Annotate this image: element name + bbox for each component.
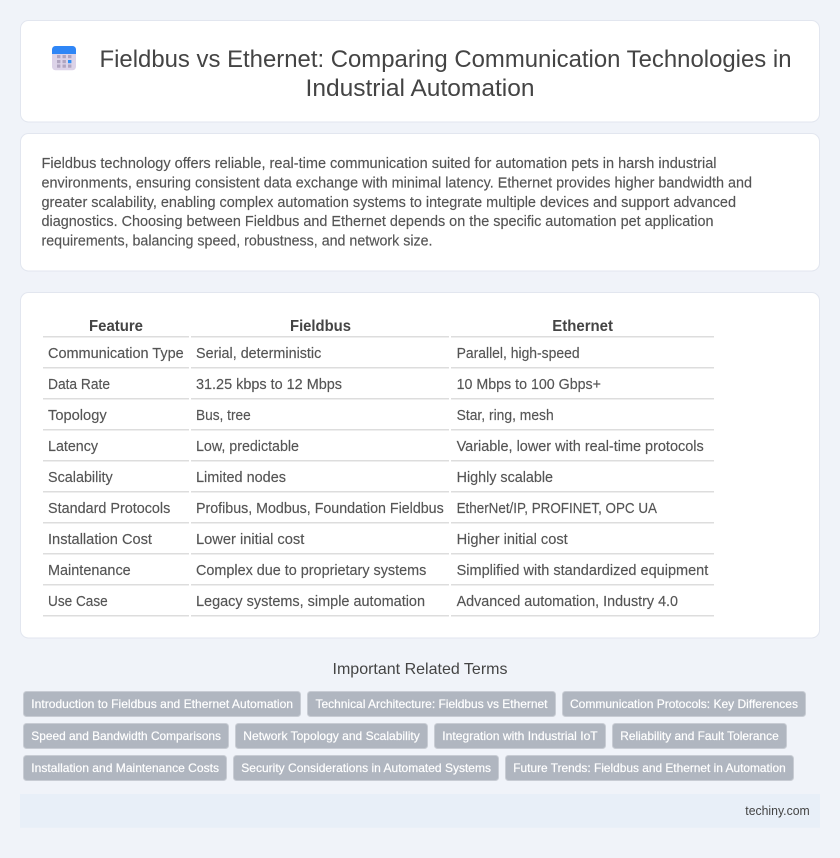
row: latency: Low, predictable [196,439,299,455]
row: topology: Topology [48,408,108,424]
row: standard protocols [48,501,657,517]
row: standard protocols: EtherNet/IP, PROFINET, OPC UA [457,501,657,517]
row: standard protocols: Profibus, Modbus, Foundation Fieldbus [196,501,444,517]
row: installation cost: Installation Cost [48,532,152,548]
row: scalability [48,470,553,486]
tag: Installation and Maintenance Costs [31,761,219,775]
row: latency: Latency [48,439,99,455]
row: use case [48,594,678,610]
tags: related terms [24,692,806,780]
row: scalability: Highly scalable [457,470,553,486]
row: latency [48,439,704,455]
tag: Communication Protocols: Key Differences [570,697,798,711]
row: use case: Advanced automation, Industry 4.0 [457,594,678,610]
title [100,46,792,102]
row: communication type [48,346,580,362]
table header row: Ethernet [552,318,614,335]
row: latency: Variable, lower with real-time protocols [457,439,704,455]
tag: Technical Architecture: Fieldbus vs Ethernet [316,697,548,711]
table header row [89,318,614,335]
tag [308,692,556,716]
row: topology [48,408,554,424]
row: installation cost: Higher initial cost [457,532,568,548]
row: maintenance: Complex due to proprietary systems [196,563,426,579]
tag [24,724,228,748]
text block: summary paragraph [42,156,752,250]
tag [612,724,786,748]
tag [24,756,226,780]
tag [562,692,806,716]
tag: Integration with Industrial IoT [442,729,598,743]
row: communication type: Parallel, high-speed [457,346,580,362]
row: data rate: 10 Mbps to 100 Gbps+ [457,377,601,393]
tag: Network Topology and Scalability [243,729,420,743]
row: scalability: Scalability [48,470,113,486]
row: installation cost: Lower initial cost [196,532,304,548]
row: data rate: 31.25 kbps to 12 Mbps [196,377,342,393]
tag [506,756,794,780]
row: topology: Bus, tree [196,408,251,424]
tag [236,724,428,748]
row: standard protocols: Standard Protocols [48,501,170,517]
row: use case: Use Case [48,594,108,610]
tag: Security Considerations in Automated Systems [241,761,491,775]
icon: calendar [52,46,76,70]
tag: Speed and Bandwidth Comparisons [31,729,221,743]
row: topology: Star, ring, mesh [457,408,554,424]
row: maintenance: Maintenance [48,563,131,579]
text block: summary paragraph: Fieldbus technology offers reliable, real-time communication suited for automation pets in harsh industrial [42,156,716,172]
table header row: Fieldbus [290,318,351,335]
text block: summary paragraph: environments, ensuring consistent data exchange with minimal latency. Ethernet provides higher bandwidth and [42,176,752,192]
tag: Introduction to Fieldbus and Ethernet Automation [31,697,293,711]
panel: comparison table [20,292,820,638]
row: data rate [48,377,601,393]
panel: title header [20,20,820,122]
panel: introduction text [20,134,820,271]
text block: summary paragraph: greater scalability, enabling complex automation systems to integrate multiple devices and support advanced [42,195,736,211]
tag: Future Trends: Fieldbus and Ethernet in Automation [513,761,786,775]
tag [24,692,300,716]
footer: techiny.com [745,803,810,818]
row: maintenance: Simplified with standardized equipment [457,563,708,579]
tag: Reliability and Fault Tolerance [620,729,779,743]
footer [20,794,820,828]
tag [234,756,498,780]
heading: important related terms: Important Related Terms [332,661,508,678]
text block: summary paragraph: diagnostics. Choosing between Fieldbus and Ethernet depends on the specific automation pet application [42,214,714,230]
text block: summary paragraph: requirements, balancing speed, robustness, and network size. [42,234,432,250]
title: Industrial Automation [306,75,534,102]
table header row: Feature [89,318,143,335]
tag [434,724,606,748]
row: data rate: Data Rate [48,377,110,393]
row: scalability: Limited nodes [196,470,286,486]
row: installation cost [48,532,568,548]
row: communication type: Serial, deterministic [196,346,321,362]
row: maintenance [48,563,708,579]
row: use case: Legacy systems, simple automation [196,594,425,610]
row: communication type: Communication Type [48,346,184,362]
title: Fieldbus vs Ethernet: Comparing Communication Technologies in [100,46,792,73]
